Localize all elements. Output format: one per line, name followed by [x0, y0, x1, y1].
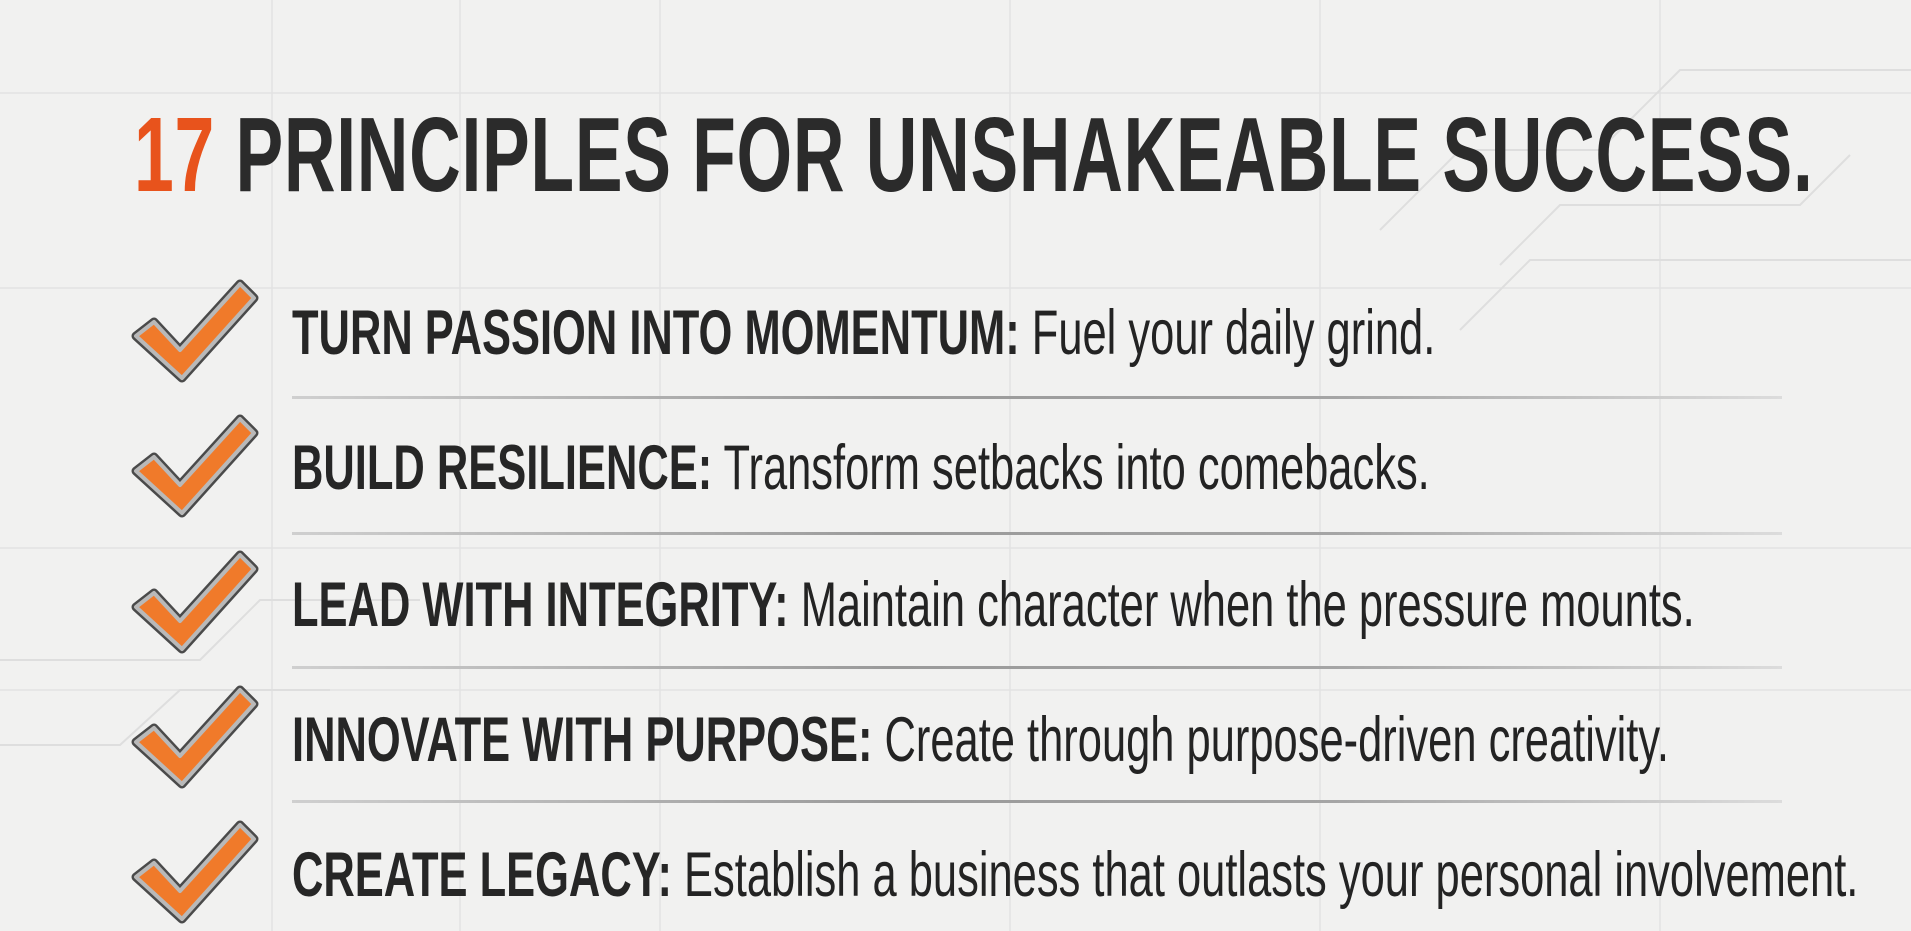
icon: check 4 — [132, 686, 258, 788]
icon: check 1 — [132, 280, 258, 382]
icon: check 2 — [132, 414, 258, 518]
row 2 text: BUILD RESILIENCE: Transform setbacks into comebacks. — [292, 433, 1430, 503]
row 1 text: TURN PASSION INTO MOMENTUM: Fuel your daily grind. — [292, 298, 1435, 368]
row 4 text: INNOVATE WITH PURPOSE: Create through purpose-driven creativity. — [292, 705, 1669, 775]
row 3 text: LEAD WITH INTEGRITY: Maintain character when the pressure mounts. — [292, 570, 1695, 640]
icon: check 5 — [132, 820, 258, 924]
title: 17 PRINCIPLES FOR UNSHAKEABLE SUCCESS. — [134, 96, 1814, 214]
icon: check 3 — [132, 550, 258, 654]
row 5 text: CREATE LEGACY: Establish a business that outlasts your personal involvement. — [292, 840, 1858, 910]
